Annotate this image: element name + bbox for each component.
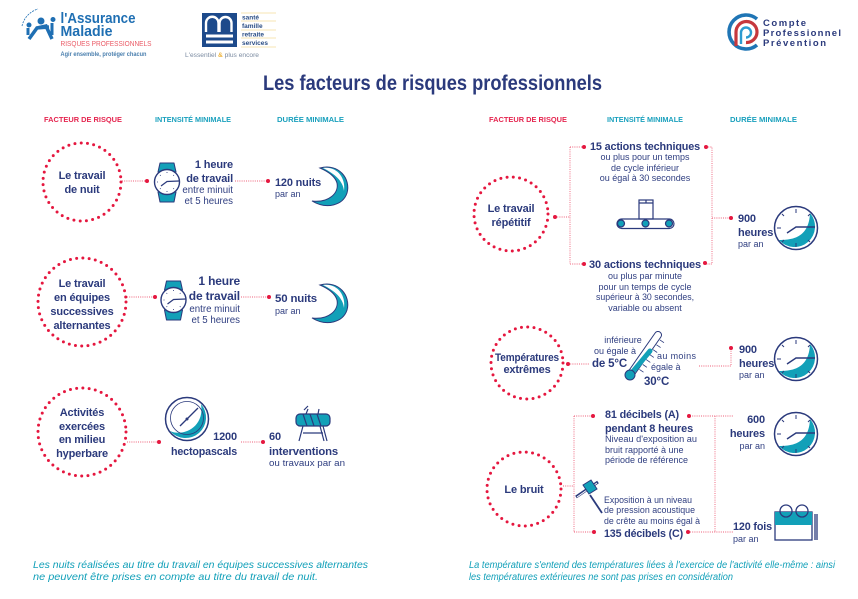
- text: 30 actions: variable ou absent: [608, 303, 682, 313]
- duration text: heures: [739, 358, 774, 370]
- text: slogan: Agir ensemble, protéger chacun: [60, 52, 147, 58]
- text: 135 decibels: de pression acoustique: [604, 505, 695, 515]
- text: hot threshold: [644, 351, 696, 388]
- title: Les facteurs de risques professionnels: [263, 72, 602, 95]
- row: travail repetitif: [474, 141, 818, 313]
- icon: thermometer: [625, 335, 664, 380]
- text: hot threshold: égale à: [651, 362, 681, 372]
- text: 81 decibels: Niveau d'exposition au: [605, 434, 697, 444]
- text: 15 actions: de cycle inférieur: [611, 163, 679, 173]
- intensity text: et 5 heures: [192, 315, 240, 326]
- intensity text: entre minuit: [182, 185, 233, 196]
- row: temperatures extremes: [491, 327, 818, 399]
- column headings left: FACTEUR DE RISQUE: [44, 117, 122, 124]
- duration text: par an: [738, 239, 764, 249]
- text: 135 decibels: [604, 495, 700, 540]
- duration text: 50 nuits: [275, 293, 317, 305]
- text: 15 actions: ou plus pour un temps: [600, 152, 690, 162]
- footnote left: Les nuits réalisées au titre du travail en équipes successives alternantes: [33, 559, 369, 571]
- footnote right: [469, 560, 836, 583]
- text: 135 decibels: de crête au moins égal à: [604, 516, 700, 526]
- duration text: ou travaux par an: [269, 458, 345, 468]
- circle: hyperbare: hyperbare: [56, 448, 108, 460]
- icon: pressure gauge: [166, 398, 208, 440]
- connectors: [127, 295, 271, 299]
- duration text: [269, 431, 345, 468]
- connectors: [122, 179, 270, 183]
- text: hot threshold: au moins: [657, 351, 696, 361]
- footnote left: ne peuvent être prises en compte au titre du travail de nuit.: [33, 571, 318, 583]
- text: CPP name: Compte: [763, 18, 806, 29]
- duration text: [275, 293, 317, 316]
- text: 135 decibels: Exposition à un niveau: [604, 495, 692, 505]
- circle: temperatures: Températures: [495, 352, 559, 364]
- footnote right: La température s'entend des températures liées à l'exercice de l'activité elle-même : ainsi: [469, 560, 836, 571]
- footnote right: les températures extérieures ne sont pas prises en considération: [469, 572, 733, 583]
- text: 135 decibels: 135 décibels (C): [604, 528, 683, 540]
- circle: repetitif: répétitif: [492, 217, 531, 229]
- circle: temperatures: extrêmes: [503, 364, 551, 376]
- text: cold threshold: [592, 335, 642, 370]
- circle: le travail de nuit: de nuit: [64, 184, 100, 196]
- column headings right: [489, 115, 797, 124]
- text: 15 actions: ou égal à 30 secondes: [600, 173, 691, 183]
- column headings left: DURÉE MINIMALE: [277, 115, 344, 124]
- circle: hyperbare: Activités: [60, 407, 104, 419]
- text: CPP name: [763, 18, 841, 49]
- circle: equipes successives: successives: [50, 306, 114, 318]
- text: 81 decibels: 81 décibels (A): [605, 409, 679, 421]
- text: 30 actions: ou plus par minute: [608, 271, 682, 281]
- circle: equipes successives: [38, 258, 126, 346]
- text: msa services: [241, 13, 276, 47]
- circle: bruit: [487, 452, 561, 526]
- column headings right: INTENSITÉ MINIMALE: [607, 115, 683, 124]
- text: cold threshold: inférieure: [604, 335, 642, 345]
- intensity text: de travail: [186, 173, 233, 185]
- icon: calendar: [775, 505, 817, 540]
- logo: Assurance Maladie: [22, 9, 152, 58]
- icon: hyperbaric chamber: [296, 406, 330, 441]
- circle: equipes successives: en équipes: [54, 292, 110, 304]
- connectors: [566, 346, 733, 366]
- row: le bruit: [487, 409, 818, 544]
- intensity text: 1 heure: [198, 274, 240, 288]
- duration text: [275, 177, 321, 199]
- logo: Compte Professionnel Prévention: [729, 15, 841, 49]
- icon: CPP rings: [729, 15, 757, 49]
- duration text: 120 fois: [733, 521, 772, 544]
- intensity text: et 5 heures: [185, 196, 233, 207]
- duration text: 900: [739, 344, 757, 356]
- circle: bruit: Le bruit: [504, 484, 544, 496]
- duration text: interventions: [269, 446, 338, 458]
- text: 81 decibels: bruit rapporté à une: [605, 445, 684, 455]
- icon: running figures: [22, 9, 55, 39]
- row: travail en equipes: [38, 258, 348, 346]
- duration text: 120 nuits: [275, 177, 321, 189]
- intensity text: 1200: [213, 431, 237, 443]
- duration text: 600 heures: heures: [730, 428, 765, 440]
- logo: Assurance Maladie: Maladie: [60, 23, 112, 40]
- text: 15 actions: [590, 141, 700, 183]
- circle: le travail de nuit: [43, 143, 121, 221]
- intensity text: 1 heure: [195, 159, 233, 171]
- text: 30 actions: [589, 259, 701, 313]
- duration text: par an: [275, 306, 301, 316]
- circle: repetitif: [474, 177, 548, 251]
- text: l'Assurance Maladie: l'Assurance: [60, 10, 136, 27]
- duration text: 600 heures: par an: [739, 441, 765, 451]
- text: 30 actions: supérieur à 30 secondes,: [596, 292, 694, 302]
- intensity text: hectopascals: [171, 446, 237, 458]
- text: cold threshold: de 5°C: [592, 358, 627, 370]
- icon: moon: [312, 284, 348, 323]
- icon: jackhammer: [576, 480, 602, 513]
- duration text: 900: [738, 213, 756, 225]
- circle: hyperbare: en milieu: [59, 434, 105, 446]
- text: CPP name: Professionnel: [763, 28, 841, 39]
- circle: equipes successives: alternantes: [53, 320, 111, 332]
- icon: watch: [154, 163, 180, 202]
- text: msa services: santé: [242, 14, 259, 22]
- duration text: heures: [738, 227, 773, 239]
- column headings right: DURÉE MINIMALE: [730, 115, 797, 124]
- circle: repetitif: Le travail: [488, 203, 534, 215]
- column headings left: INTENSITÉ MINIMALE: [155, 115, 231, 124]
- duration text: [739, 344, 774, 380]
- icon: msa square: [202, 13, 237, 47]
- connectors: [553, 145, 733, 266]
- icon: clock: [774, 338, 818, 380]
- column headings left: [44, 115, 344, 124]
- column headings right: FACTEUR DE RISQUE: [489, 117, 567, 124]
- row: milieu hyperbare: [38, 388, 345, 476]
- text: cold threshold: ou égale à: [594, 346, 636, 356]
- circle: equipes successives: Le travail: [59, 278, 105, 290]
- intensity text: [182, 159, 233, 207]
- text: 30 actions: pour un temps de cycle: [598, 282, 692, 292]
- text: CPP name: Prévention: [763, 38, 826, 49]
- duration text: [738, 213, 773, 249]
- duration text: 120 fois: par an: [733, 534, 759, 544]
- circle: le travail de nuit: Le travail: [59, 170, 105, 182]
- circle: temperatures: [491, 327, 563, 399]
- footnote left: [33, 559, 369, 583]
- intensity text: de travail: [189, 289, 240, 303]
- text: 30 actions: 30 actions techniques: [589, 259, 701, 271]
- text: msa services: services: [242, 40, 268, 47]
- duration text: 120 fois: 120 fois: [733, 521, 772, 533]
- text: risques professionnels: RISQUES PROFESSIONNELS: [60, 39, 152, 48]
- logo: MSA: [185, 13, 276, 59]
- duration text: 60: [269, 431, 281, 443]
- icon: moon: [312, 167, 348, 206]
- text: hot threshold: 30°C: [644, 376, 669, 388]
- duration text: 600 heures: [730, 414, 765, 451]
- icon: clock: [774, 412, 818, 456]
- text: 81 decibels: [605, 409, 697, 465]
- intensity text: [171, 431, 237, 458]
- connectors: [127, 440, 265, 444]
- text: msa services: retraite: [242, 32, 264, 38]
- text: 81 decibels: pendant 8 heures: [605, 423, 693, 435]
- row: travail de nuit: [43, 143, 348, 221]
- text: msa slogan: L'essentiel & plus encore: [185, 53, 260, 59]
- intensity text: [189, 274, 240, 326]
- intensity text: entre minuit: [189, 304, 240, 315]
- icon: watch: [161, 281, 186, 320]
- text: msa services: famille: [242, 23, 263, 30]
- duration text: par an: [275, 189, 301, 199]
- circle: hyperbare: [38, 388, 126, 476]
- text: 81 decibels: période de référence: [605, 455, 688, 465]
- text: 15 actions: 15 actions techniques: [590, 141, 700, 153]
- circle: hyperbare: exercées: [59, 421, 105, 433]
- duration text: 600 heures: 600: [747, 414, 765, 426]
- connectors: [563, 414, 733, 534]
- icon: conveyor belt: [617, 200, 674, 228]
- duration text: par an: [739, 370, 765, 380]
- icon: clock: [774, 206, 818, 250]
